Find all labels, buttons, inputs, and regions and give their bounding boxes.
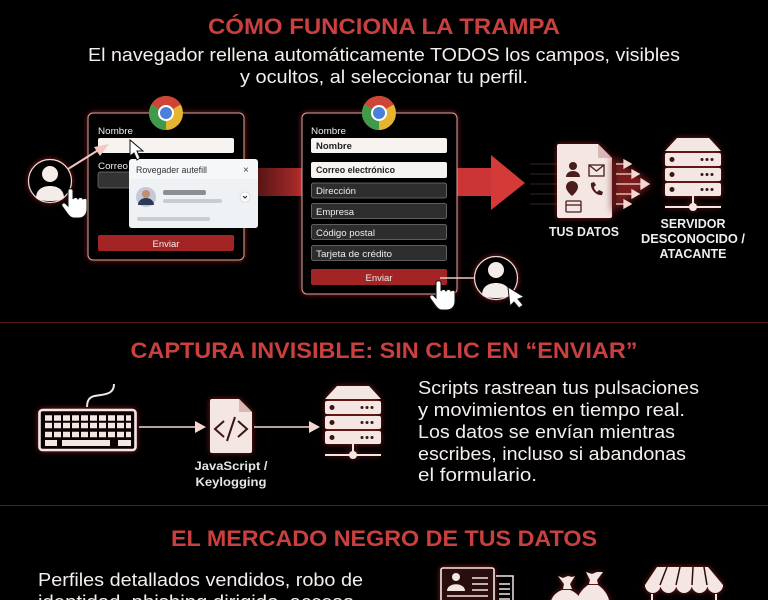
panel: form after autofill: Dirección bbox=[316, 186, 356, 197]
icon: server bbox=[665, 138, 721, 211]
panel: form after autofill: Correo electrónico bbox=[316, 165, 395, 176]
panel: form before autofill: Nombre bbox=[98, 126, 133, 137]
panel: form after autofill: Empresa bbox=[316, 207, 355, 218]
submit button bbox=[311, 269, 447, 285]
panel: form after autofill: Tarjeta de crédito bbox=[316, 249, 392, 260]
panel: form before autofill: Correo bbox=[98, 161, 128, 172]
text: invisible capture description: Los datos se envían mientras bbox=[418, 421, 675, 442]
icon: cursor bbox=[130, 140, 143, 160]
label: unknown server: ATACANTE bbox=[660, 247, 726, 261]
label: javascript keylogging: JavaScript / bbox=[194, 459, 268, 473]
icon: script file bbox=[210, 399, 252, 453]
icon: market stall bbox=[645, 567, 723, 600]
icon: user with cursor bbox=[430, 256, 524, 310]
icon: money bags bbox=[550, 572, 610, 600]
text: invisible capture description bbox=[418, 377, 699, 485]
panel: form before autofill bbox=[88, 96, 244, 260]
intro text: El navegador rellena automáticamente TODOS los campos, visibles bbox=[88, 44, 680, 65]
text: invisible capture description: el formulario. bbox=[418, 464, 537, 485]
icon: keyboard bbox=[40, 384, 136, 450]
text: black market description bbox=[38, 569, 363, 600]
icon: server bbox=[325, 386, 381, 459]
panel: form after autofill: Código postal bbox=[316, 228, 375, 239]
icon: chrome logo bbox=[149, 96, 183, 130]
autofill popup: Rovegader autefill bbox=[136, 165, 207, 175]
panel: form after autofill: Nombre bbox=[316, 141, 352, 152]
label: unknown server: SERVIDOR bbox=[660, 217, 726, 231]
panel: form after autofill: Enviar bbox=[366, 273, 392, 284]
arrows: data to server bbox=[613, 156, 652, 212]
icon: your data document bbox=[530, 144, 612, 218]
title: how the trap works: CÓMO FUNCIONA LA TRAMPA bbox=[208, 14, 560, 39]
panel: form before autofill: Enviar bbox=[153, 239, 179, 250]
autofill popup bbox=[129, 159, 258, 228]
label: javascript keylogging: Keylogging bbox=[196, 475, 266, 489]
icon: chrome logo bbox=[362, 96, 396, 130]
submit button bbox=[98, 235, 234, 251]
label: javascript keylogging bbox=[194, 459, 268, 489]
red arrow through the forms bbox=[244, 155, 525, 210]
intro text: y ocultos, al seleccionar tu perfil. bbox=[240, 66, 528, 87]
label: unknown server: DESCONOCIDO / bbox=[641, 232, 746, 246]
autofill popup: × bbox=[243, 165, 249, 176]
text: black market description: Perfiles detallados vendidos, robo de bbox=[38, 569, 363, 590]
intro text bbox=[88, 44, 680, 87]
arrow: script to server bbox=[254, 421, 320, 433]
text: invisible capture description: escribes, incluso si abandonas bbox=[418, 443, 686, 464]
panel: form after autofill: Nombre bbox=[311, 126, 346, 137]
arrow: keyboard to script bbox=[139, 421, 206, 433]
icon: id profile bbox=[441, 568, 513, 600]
label: unknown server bbox=[641, 217, 746, 261]
label: your data: TUS DATOS bbox=[549, 225, 619, 239]
icon: user with arrow bbox=[28, 144, 109, 218]
heading: invisible capture: CAPTURA INVISIBLE: SIN CLIC EN “ENVIAR” bbox=[130, 338, 638, 363]
panel: form after autofill bbox=[302, 96, 457, 294]
heading: black market: EL MERCADO NEGRO DE TUS DATOS bbox=[171, 526, 597, 551]
text: invisible capture description: y movimientos en tiempo real. bbox=[418, 399, 685, 420]
text: invisible capture description: Scripts rastrean tus pulsaciones bbox=[418, 377, 699, 398]
